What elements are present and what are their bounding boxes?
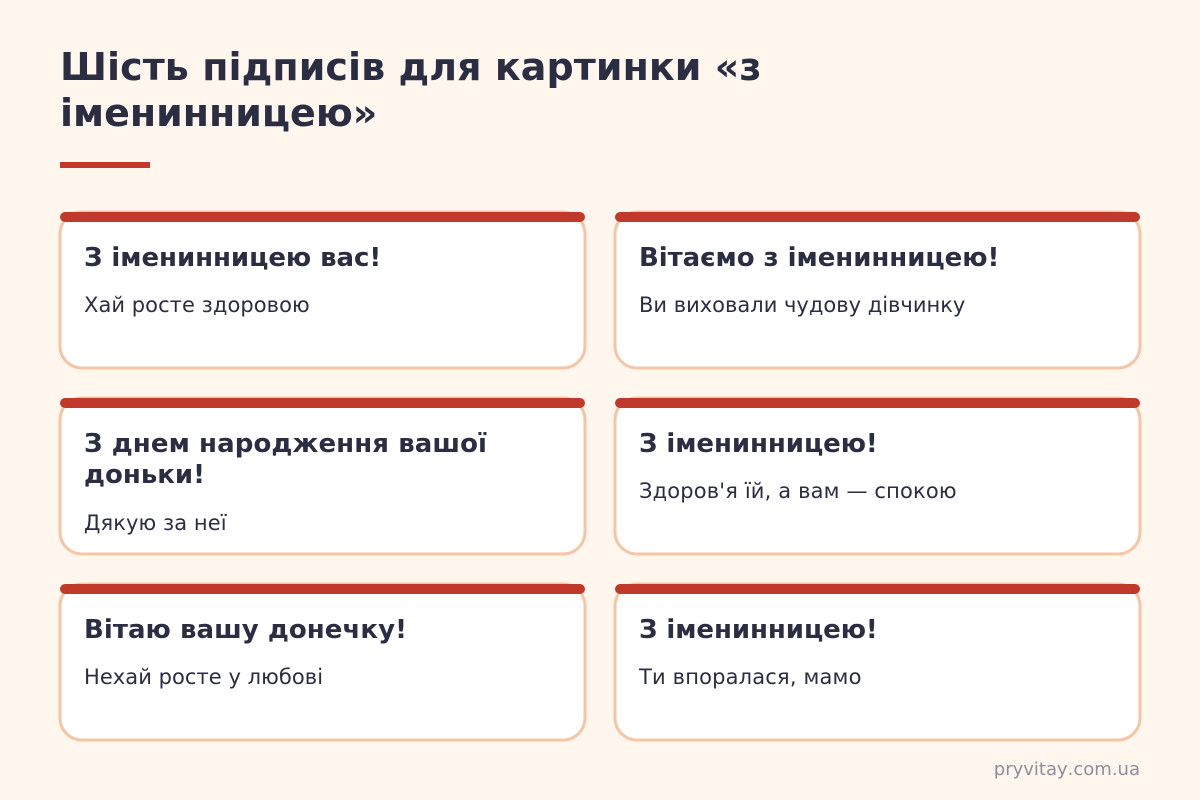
card 3 heading: З днем народження вашої <box>84 429 487 459</box>
card 6 text: Ти впоралася, мамо <box>639 665 862 689</box>
card 1 heading: З іменинницею вас! <box>84 243 381 273</box>
card 2 text: Ви виховали чудову дівчинку <box>639 293 965 317</box>
panel: card 2 <box>614 210 1142 370</box>
card 3 text: Дякую за неї <box>84 511 227 535</box>
panel: card 4 <box>614 396 1142 556</box>
panel: card 6 <box>614 582 1142 742</box>
card 2 heading: Вітаємо з іменинницею! <box>639 243 999 273</box>
card 6 heading: З іменинницею! <box>639 615 878 645</box>
panel: card 5 <box>58 582 586 742</box>
card 4 text: Здоров'я їй, а вам — спокою <box>639 479 957 503</box>
card 3 heading: доньки! <box>84 460 205 490</box>
panel: card 3 <box>58 396 586 556</box>
panel: card 1 <box>58 210 586 370</box>
card 5 text: Нехай росте у любові <box>84 665 323 689</box>
title: іменинницею» <box>60 91 377 135</box>
title accent rule <box>60 162 150 168</box>
card 3 heading <box>84 429 487 490</box>
title <box>60 45 762 135</box>
card 5 heading: Вітаю вашу донечку! <box>84 615 407 645</box>
card 4 heading: З іменинницею! <box>639 429 878 459</box>
card 1 text: Хай росте здоровою <box>84 293 310 317</box>
footer source: pryvitay.com.ua <box>994 759 1140 780</box>
title: Шість підписів для картинки «з <box>60 45 762 89</box>
